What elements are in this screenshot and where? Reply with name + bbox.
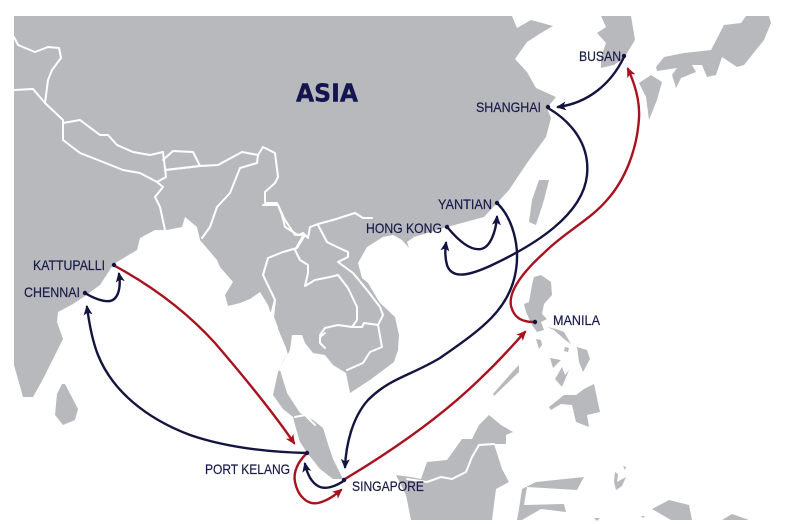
label: Hong Kong: HONG KONG [366,220,442,236]
landmass: Japan [656,16,771,88]
route: Manila to Busan [511,69,639,322]
landmass: Sri Lanka [55,384,78,425]
route: Port Kelang to Chennai [87,307,307,453]
landmass: mainland Asia [14,16,556,479]
route: Shanghai to Hong Kong [445,108,587,275]
landmass: Philippine islands [493,327,600,427]
map: country borders [14,37,494,482]
label: Chennai: CHENNAI [24,284,80,300]
label: Kattupalli: KATTUPALLI [33,257,105,273]
heading: ASIA: ASIA [296,78,359,108]
label: Busan: BUSAN [579,48,621,64]
label: Shanghai: SHANGHAI [476,99,541,115]
route: Kattupalli to Port Kelang [115,266,294,443]
landmass: eastern islands [594,466,749,521]
label: Yantian: YANTIAN [438,196,492,212]
route: Yantian to Singapore [345,204,517,467]
route: Busan to Shanghai [558,57,624,107]
landmass: Borneo [396,415,513,520]
landmass: Luzon [524,275,552,332]
label: Singapore: SINGAPORE [352,478,424,494]
landmass: Korea [597,16,635,68]
label: Manila: MANILA [553,312,601,328]
label: Port Kelang: PORT KELANG [205,461,290,477]
port markers [83,54,626,482]
route: Singapore to Manila [345,332,525,479]
route: Port Kelang to Singapore [295,454,341,503]
route: Chennai to Kattupalli [85,274,120,301]
landmass: Kyushu [639,75,662,120]
landmass: Taiwan [529,180,549,225]
landmass: Sulawesi [517,477,584,520]
route: Hong Kong to Yantian [448,217,497,249]
route: Singapore to Port Kelang [305,464,345,488]
